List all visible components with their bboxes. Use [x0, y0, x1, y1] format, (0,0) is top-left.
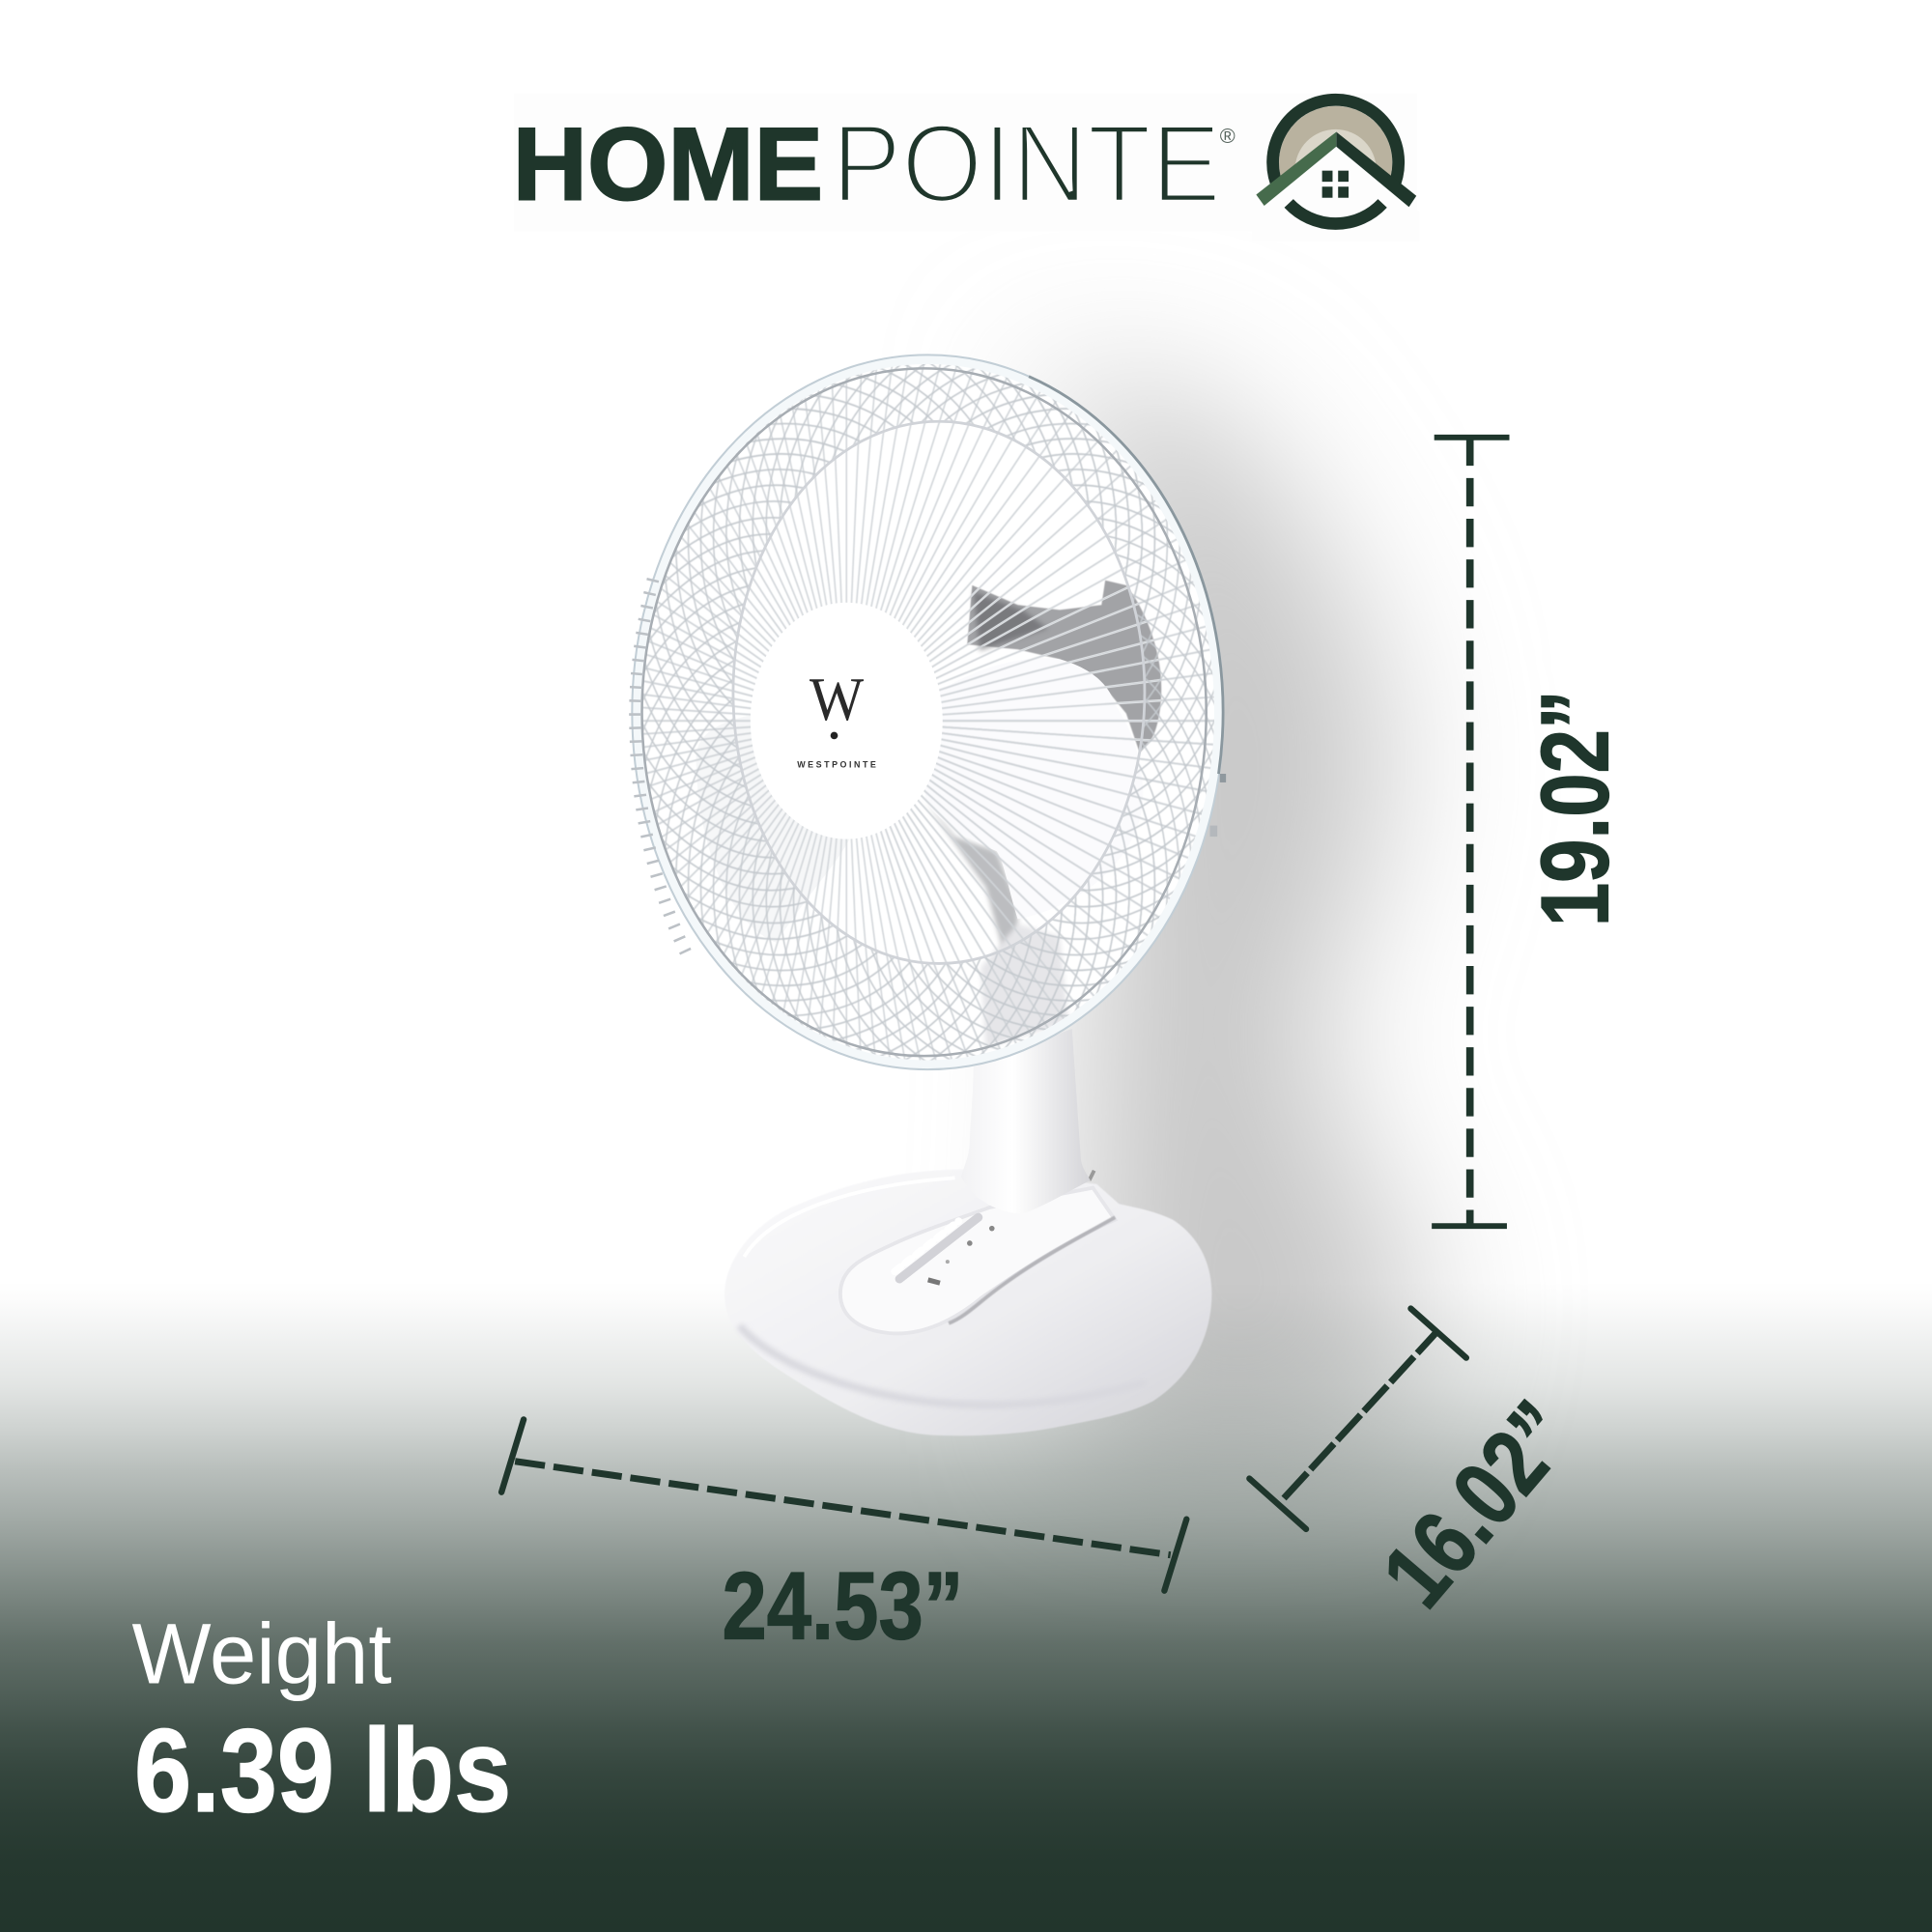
hub W emblem: W: [810, 665, 865, 733]
radial spokes: [643, 364, 1214, 1061]
control panel: [840, 1188, 1115, 1333]
fan shadow on wall: [1023, 382, 1430, 1454]
right blade: [924, 658, 1143, 920]
dimension: depth line: [1249, 1309, 1466, 1529]
dimension label: height: 19.02”: [1522, 690, 1630, 926]
logo icon: house in ring: [1252, 99, 1419, 242]
spiral mesh grille: [643, 364, 1214, 1061]
neck behind grille: [980, 924, 1068, 1047]
base ridge: [739, 1325, 1146, 1405]
motor gray region lower: [925, 801, 1018, 969]
logo wordmark: POINTE: POINTE: [832, 102, 1221, 226]
fan product illustration: [629, 354, 1227, 1435]
motor gray region upper: [967, 581, 1161, 753]
weight label: Weight: [131, 1605, 392, 1701]
dimension: width line: [501, 1419, 1186, 1591]
base upper edge: [744, 1178, 955, 1257]
hub dot: [831, 732, 838, 739]
bottom gradient band: [0, 1282, 1932, 1932]
head backing: [632, 355, 1224, 1069]
logo: [513, 94, 1419, 242]
logo wordmark: HOME: HOME: [513, 106, 823, 222]
fan head: [629, 354, 1227, 1070]
dark motor detail: [974, 591, 1047, 650]
oscillation knob: [1090, 1171, 1094, 1180]
left blade: [696, 715, 850, 943]
logo backing: [514, 94, 1417, 232]
motor white wire overlay: [968, 587, 1161, 742]
dimension label: depth: 16.02”: [1362, 1381, 1593, 1626]
registered mark: ®: [1220, 124, 1236, 148]
panel groove: [949, 1217, 1115, 1323]
fan neck: [961, 1029, 1091, 1213]
inner ring wire: [733, 421, 1145, 963]
dimension label: width: 24.53”: [722, 1552, 963, 1660]
weight value: 6.39 lbs: [134, 1704, 511, 1836]
hub brand text: WESTPOINTE: [797, 760, 876, 770]
hub cap: [751, 603, 943, 839]
rim: [632, 355, 1226, 1069]
dimension: height line: [1432, 438, 1509, 1226]
fan base: [724, 1169, 1211, 1435]
speed switch: [895, 1217, 995, 1286]
